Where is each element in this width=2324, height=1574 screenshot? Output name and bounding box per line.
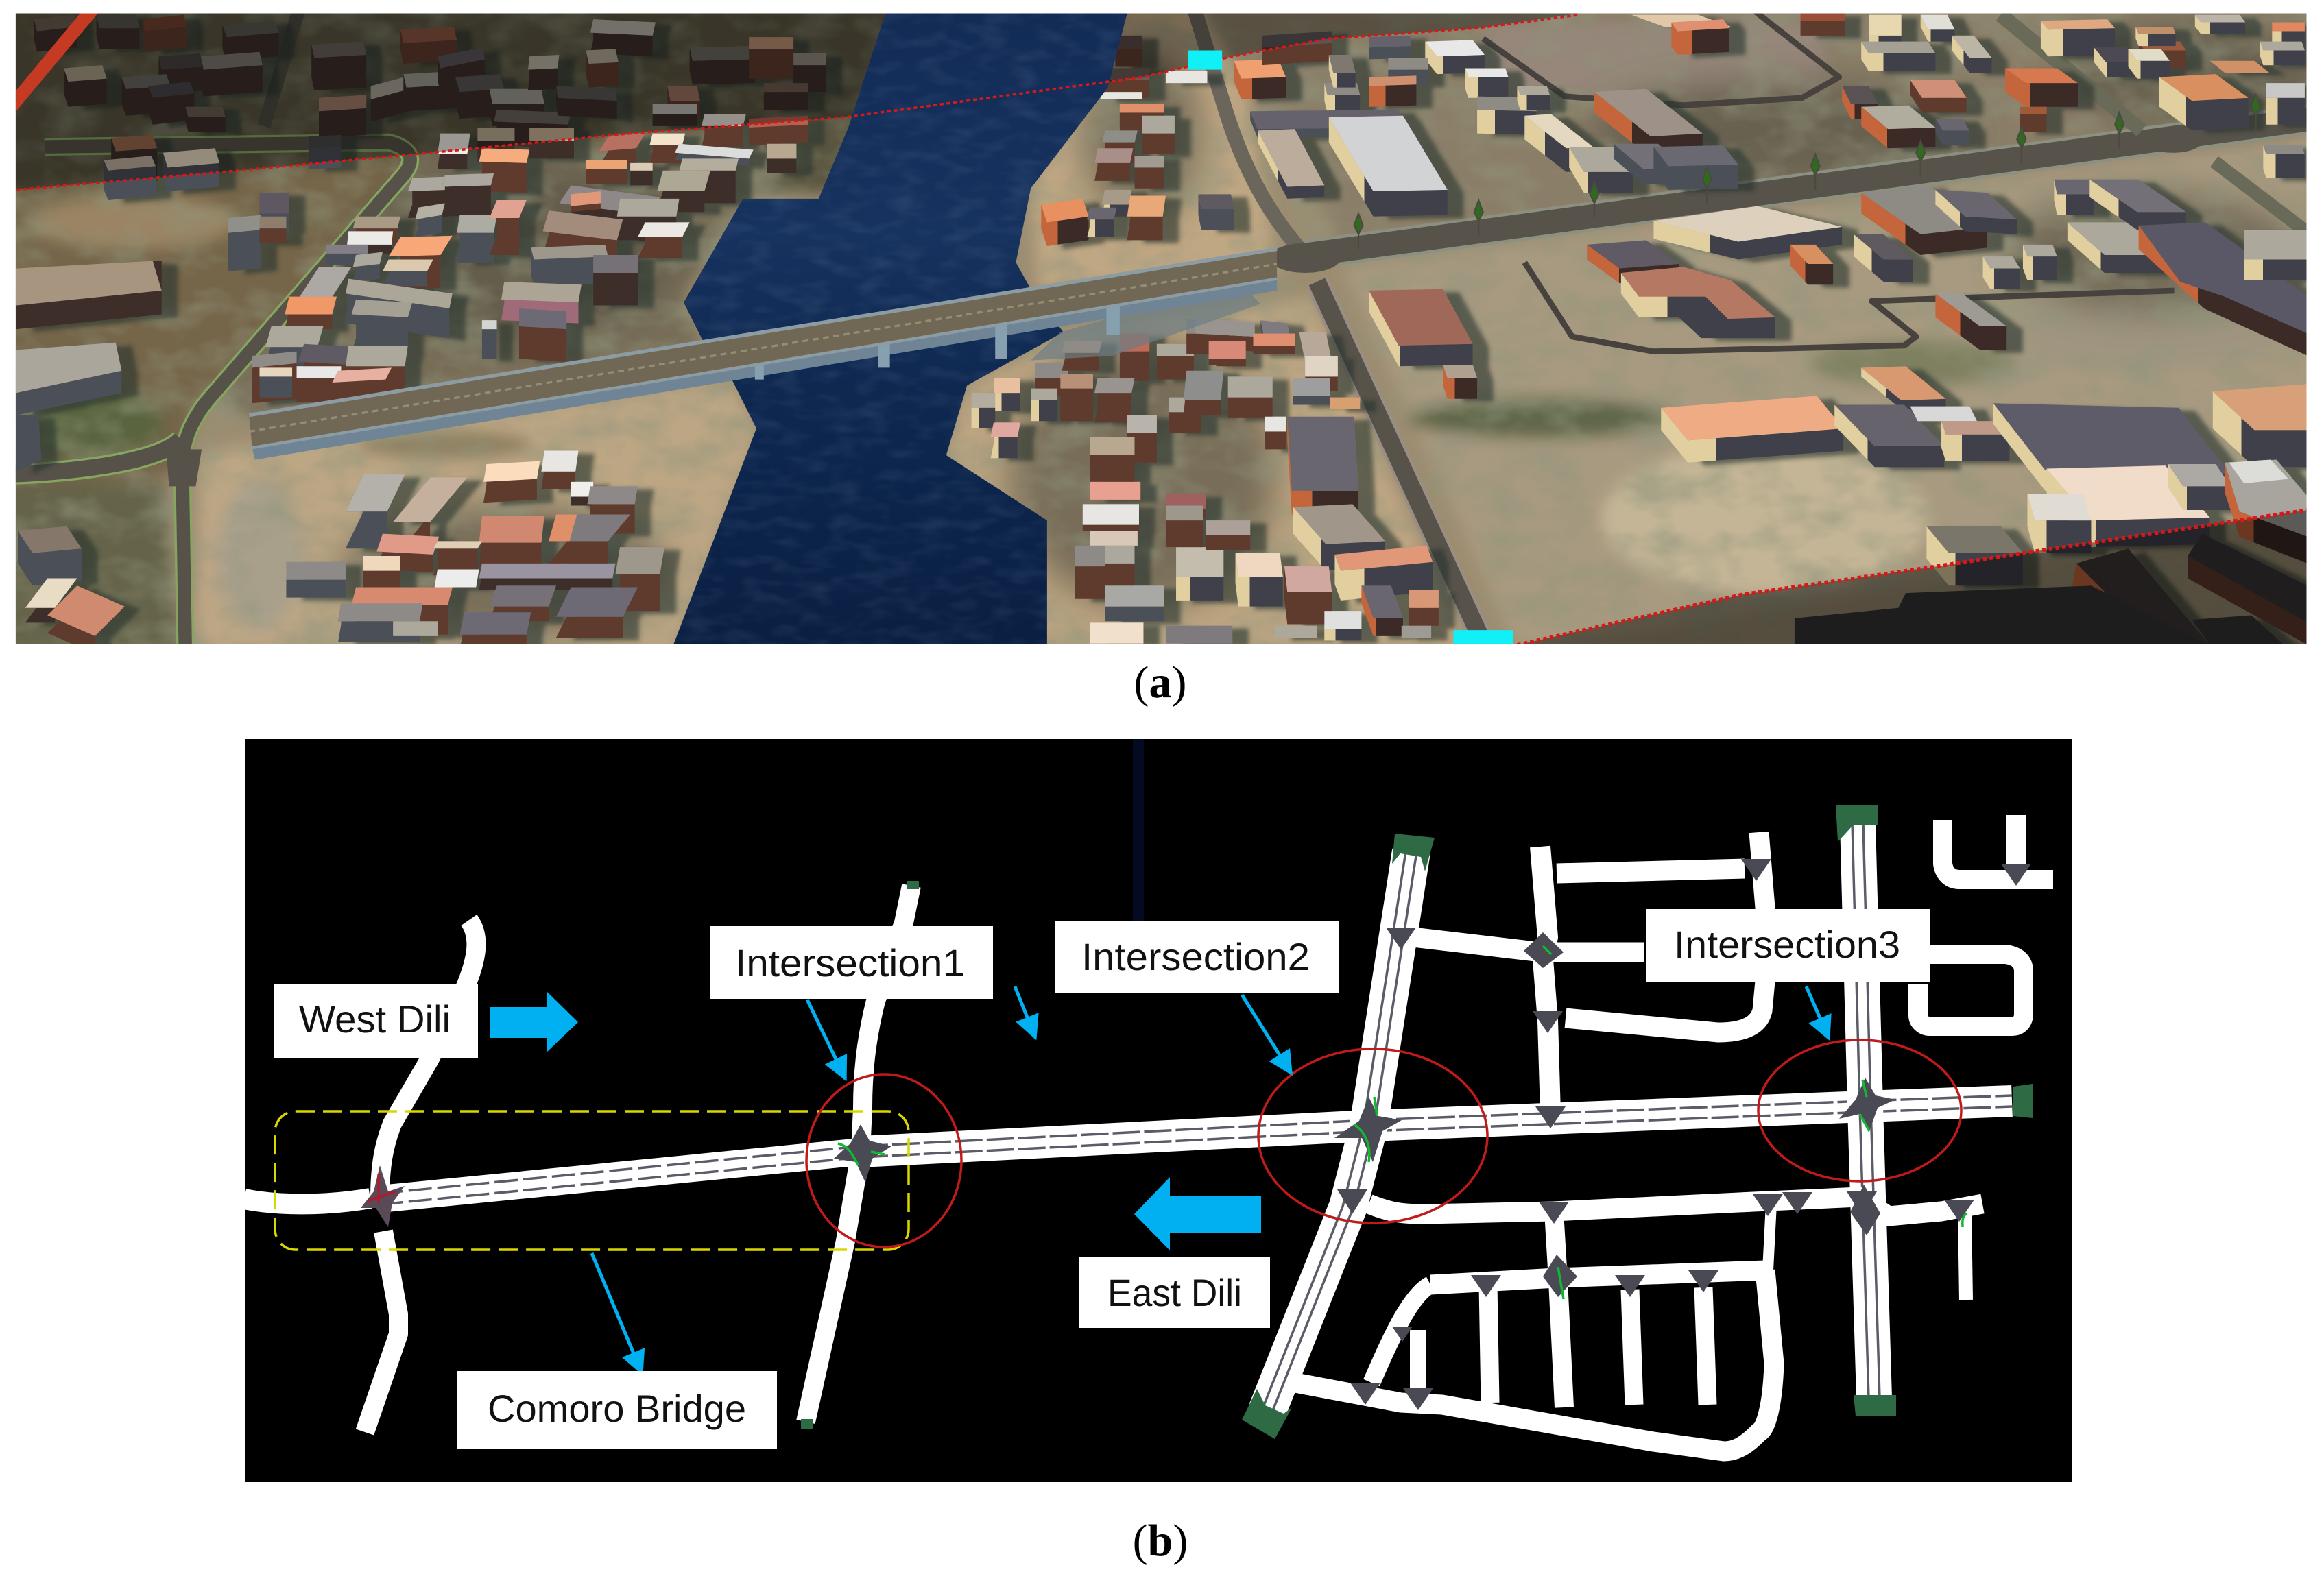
label: Intersection3: Intersection3 [1674, 923, 1900, 966]
north-south arterial at intersection 2 [1261, 851, 1417, 1412]
red circle: intersection 2 [1258, 1049, 1487, 1223]
buildings south of the main road [1369, 180, 2308, 645]
label: East Dili: East Dili [1107, 1271, 1242, 1314]
pointer arrow: stray short arrow [1015, 986, 1035, 1038]
region outline: Comoro Bridge [275, 1111, 909, 1250]
bridge [249, 249, 1277, 459]
red circle: intersection 1 [806, 1074, 961, 1247]
river [667, 13, 1142, 645]
road network of the city model [8, 8, 2314, 653]
label: Intersection1 [710, 926, 993, 999]
label: West Dili: West Dili [299, 997, 451, 1041]
big arrow: traffic from East Dili [1134, 1177, 1261, 1250]
street trees along the main road [1354, 95, 2260, 249]
panel (b): road network map [244, 739, 2072, 1482]
label: West Dili [274, 984, 478, 1058]
pointer arrow: intersection 2 [1242, 995, 1291, 1074]
main east-west road [380, 1095, 2012, 1204]
red circle: intersection 3 [1758, 1040, 1961, 1181]
pointer arrow: Comoro Bridge [592, 1253, 642, 1373]
signal markings at junctions [368, 946, 1967, 1299]
red strip, top left [15, 13, 98, 112]
label: Comoro Bridge [457, 1371, 777, 1449]
local street grid [1295, 815, 2053, 1451]
shaded areas beyond the dotted boundary [15, 13, 2308, 645]
caption (b): (b) [1133, 1516, 1188, 1566]
dense-cluster ground shade [341, 22, 2324, 638]
terrain ground [0, 0, 2324, 653]
label: East Dili [1079, 1257, 1270, 1328]
buildings on the west bank [16, 15, 826, 654]
big arrow: traffic from West Dili [490, 991, 578, 1052]
mottled ground texture [15, 13, 2308, 645]
panel (a): 3D city model with river and bridge [15, 14, 2307, 644]
pointer arrow: intersection 1 [807, 1000, 846, 1079]
intersection junctions [361, 859, 2031, 1410]
west roads [244, 886, 911, 1432]
faint river ghost [1133, 739, 1144, 923]
label: Intersection1: Intersection1 [735, 941, 965, 984]
caption (a): (a) [1134, 657, 1186, 707]
label: Intersection2: Intersection2 [1081, 935, 1310, 978]
label: Intersection3 [1646, 909, 1930, 982]
red dotted boundary lines [16, 15, 2308, 645]
buildings north of the main road [1166, 13, 2305, 230]
label: Intersection2 [1055, 921, 1339, 993]
label: Comoro Bridge: Comoro Bridge [488, 1387, 746, 1430]
buildings on the east bank, river side [972, 36, 1439, 644]
north-south arterial at intersection 3 [1852, 822, 1880, 1398]
green road-end zones [801, 805, 2033, 1439]
pointer arrow: intersection 3 [1806, 986, 1829, 1039]
cyan boundary markers [1188, 51, 1513, 645]
